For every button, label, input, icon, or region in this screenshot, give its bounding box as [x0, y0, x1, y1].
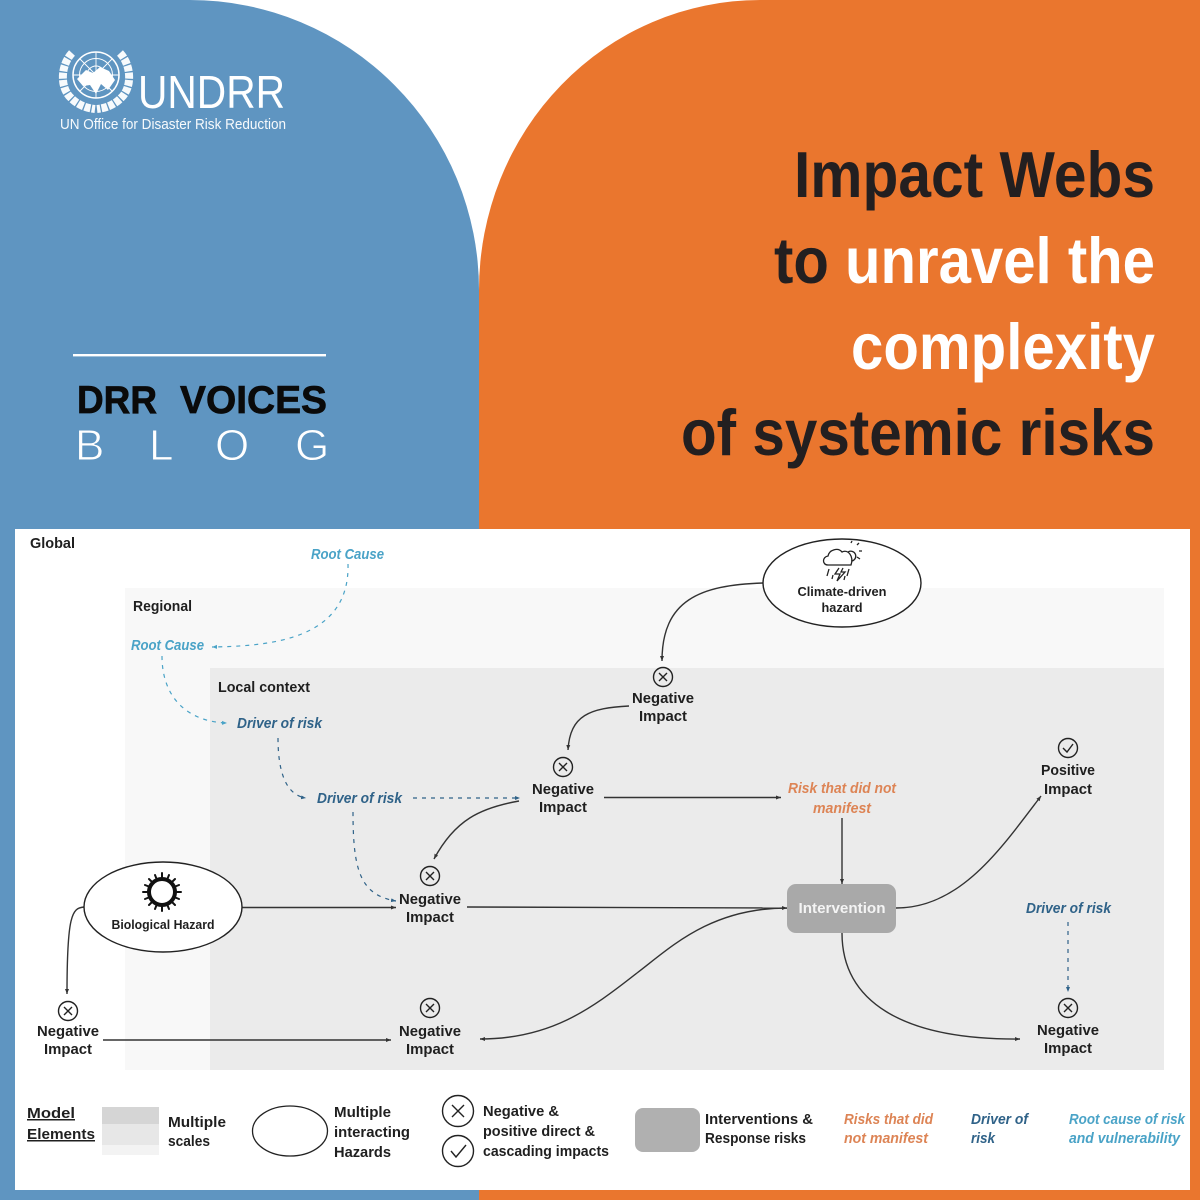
risk that did not manifest	[788, 780, 897, 817]
logo: UNDRR	[60, 52, 286, 133]
legend: impacts text: Negative &	[483, 1103, 559, 1120]
blog label: DRR Voices	[73, 354, 329, 470]
legend: root cause: Root cause of risk	[1069, 1111, 1186, 1128]
legend: risks that did not manifest: Risks that did	[844, 1111, 934, 1128]
legend: hazards text	[334, 1104, 410, 1161]
legend: multiple scales text: scales	[168, 1133, 210, 1150]
node: negative impact right	[1037, 998, 1099, 1057]
node: positive impact	[1041, 738, 1095, 798]
hazard: climate-driven: hazard	[822, 600, 863, 615]
panel: impact web diagram	[15, 529, 1190, 1190]
legend: risks that did not manifest: not manifest	[844, 1130, 929, 1147]
panel: regional scale	[125, 588, 1164, 1070]
arrows: connections	[67, 564, 1068, 1040]
legend: hazard ellipse	[252, 1106, 328, 1156]
label: Biological Hazard	[112, 917, 215, 932]
legend: risks that did not manifest	[844, 1111, 934, 1147]
node: negative impact centre	[532, 758, 594, 816]
label: Climate-driven	[798, 584, 887, 599]
title: complexity	[851, 310, 1155, 383]
icon: storm cloud	[824, 541, 862, 581]
legend: multiple scales swatch	[102, 1107, 159, 1155]
node: negative impact left: Impact	[44, 1041, 92, 1058]
node: negative impact centre: Negative	[532, 781, 594, 798]
legend: driver of risk: Driver of	[971, 1111, 1030, 1128]
blog letters: O	[215, 421, 249, 470]
node: negative impact lower	[399, 998, 461, 1058]
legend: hazards text: Multiple	[334, 1104, 391, 1121]
node: negative impact centre: Impact	[539, 799, 587, 816]
node: negative impact left: Negative	[37, 1023, 99, 1040]
risk that did not manifest: manifest	[813, 800, 872, 817]
legend: interventions text: Interventions &	[705, 1111, 813, 1128]
legend: impact icons	[442, 1096, 474, 1166]
node: negative impact right: Impact	[1044, 1040, 1092, 1057]
legend: multiple scales text	[168, 1114, 226, 1150]
intervention box	[787, 884, 896, 933]
legend: interventions text	[705, 1111, 813, 1147]
legend: driver of risk	[971, 1111, 1030, 1147]
node: negative impact middle	[399, 866, 461, 926]
intervention box: Intervention	[798, 900, 886, 917]
risk that did not manifest: Risk that did not	[788, 780, 897, 797]
icon: UN emblem	[63, 52, 129, 109]
node: negative impact middle: Negative	[399, 891, 461, 908]
legend: driver of risk: risk	[971, 1130, 996, 1147]
legend: hazards text: Hazards	[334, 1144, 391, 1161]
blog letters: B	[75, 421, 104, 470]
title: of systemic risks	[681, 396, 1155, 469]
node: negative impact middle: Impact	[406, 909, 454, 926]
label: local context: Local context	[218, 679, 310, 696]
legend: hazards text: interacting	[334, 1124, 410, 1141]
legend: model elements	[27, 1096, 1186, 1166]
node: negative impact top: Impact	[639, 708, 687, 725]
panel: blue background	[0, 0, 479, 1200]
root cause: global: Root Cause	[311, 546, 384, 563]
legend heading: Model	[27, 1105, 75, 1122]
blog letters: G	[295, 421, 329, 470]
label: global: Global	[30, 535, 75, 552]
node: positive impact: Positive	[1041, 762, 1095, 779]
node: negative impact lower: Impact	[406, 1041, 454, 1058]
node: negative impact top: Negative	[632, 690, 694, 707]
wordmark: UNDRR	[138, 66, 285, 118]
panel: orange background	[479, 0, 1200, 1200]
heading: DRR	[77, 379, 157, 422]
blog letters: L	[149, 421, 173, 470]
legend: interventions text: Response risks	[705, 1130, 806, 1147]
tagline: UN Office for Disaster Risk Reduction	[60, 116, 286, 133]
label: regional: Regional	[133, 598, 192, 615]
title: Impact Webs	[794, 138, 1155, 211]
icon: virus	[143, 873, 181, 911]
node: negative impact left	[37, 1002, 99, 1058]
driver of risk 1: Driver of risk	[237, 715, 323, 732]
hazard: biological	[84, 862, 242, 952]
node: negative impact top	[632, 668, 694, 725]
node: positive impact: Impact	[1044, 781, 1092, 798]
legend: root cause	[1069, 1111, 1186, 1147]
hazard: climate-driven	[763, 539, 921, 627]
legend: impacts text	[483, 1103, 609, 1160]
legend heading: Elements	[27, 1126, 95, 1143]
node: negative impact lower: Negative	[399, 1023, 461, 1040]
panel: local context scale	[210, 668, 1164, 1070]
title: to unravel the	[774, 224, 1155, 297]
legend heading	[27, 1105, 95, 1143]
legend: multiple scales text: Multiple	[168, 1114, 226, 1131]
legend: intervention swatch	[635, 1108, 700, 1152]
legend: impacts text: cascading impacts	[483, 1143, 609, 1160]
driver of risk 2: Driver of risk	[317, 790, 403, 807]
legend: impacts text: positive direct &	[483, 1123, 595, 1140]
driver of risk 3: Driver of risk	[1026, 900, 1112, 917]
title	[681, 138, 1155, 469]
heading: VOICES	[180, 379, 327, 422]
root cause: regional: Root Cause	[131, 637, 204, 654]
legend: root cause: and vulnerability	[1069, 1130, 1181, 1147]
node: negative impact right: Negative	[1037, 1022, 1099, 1039]
